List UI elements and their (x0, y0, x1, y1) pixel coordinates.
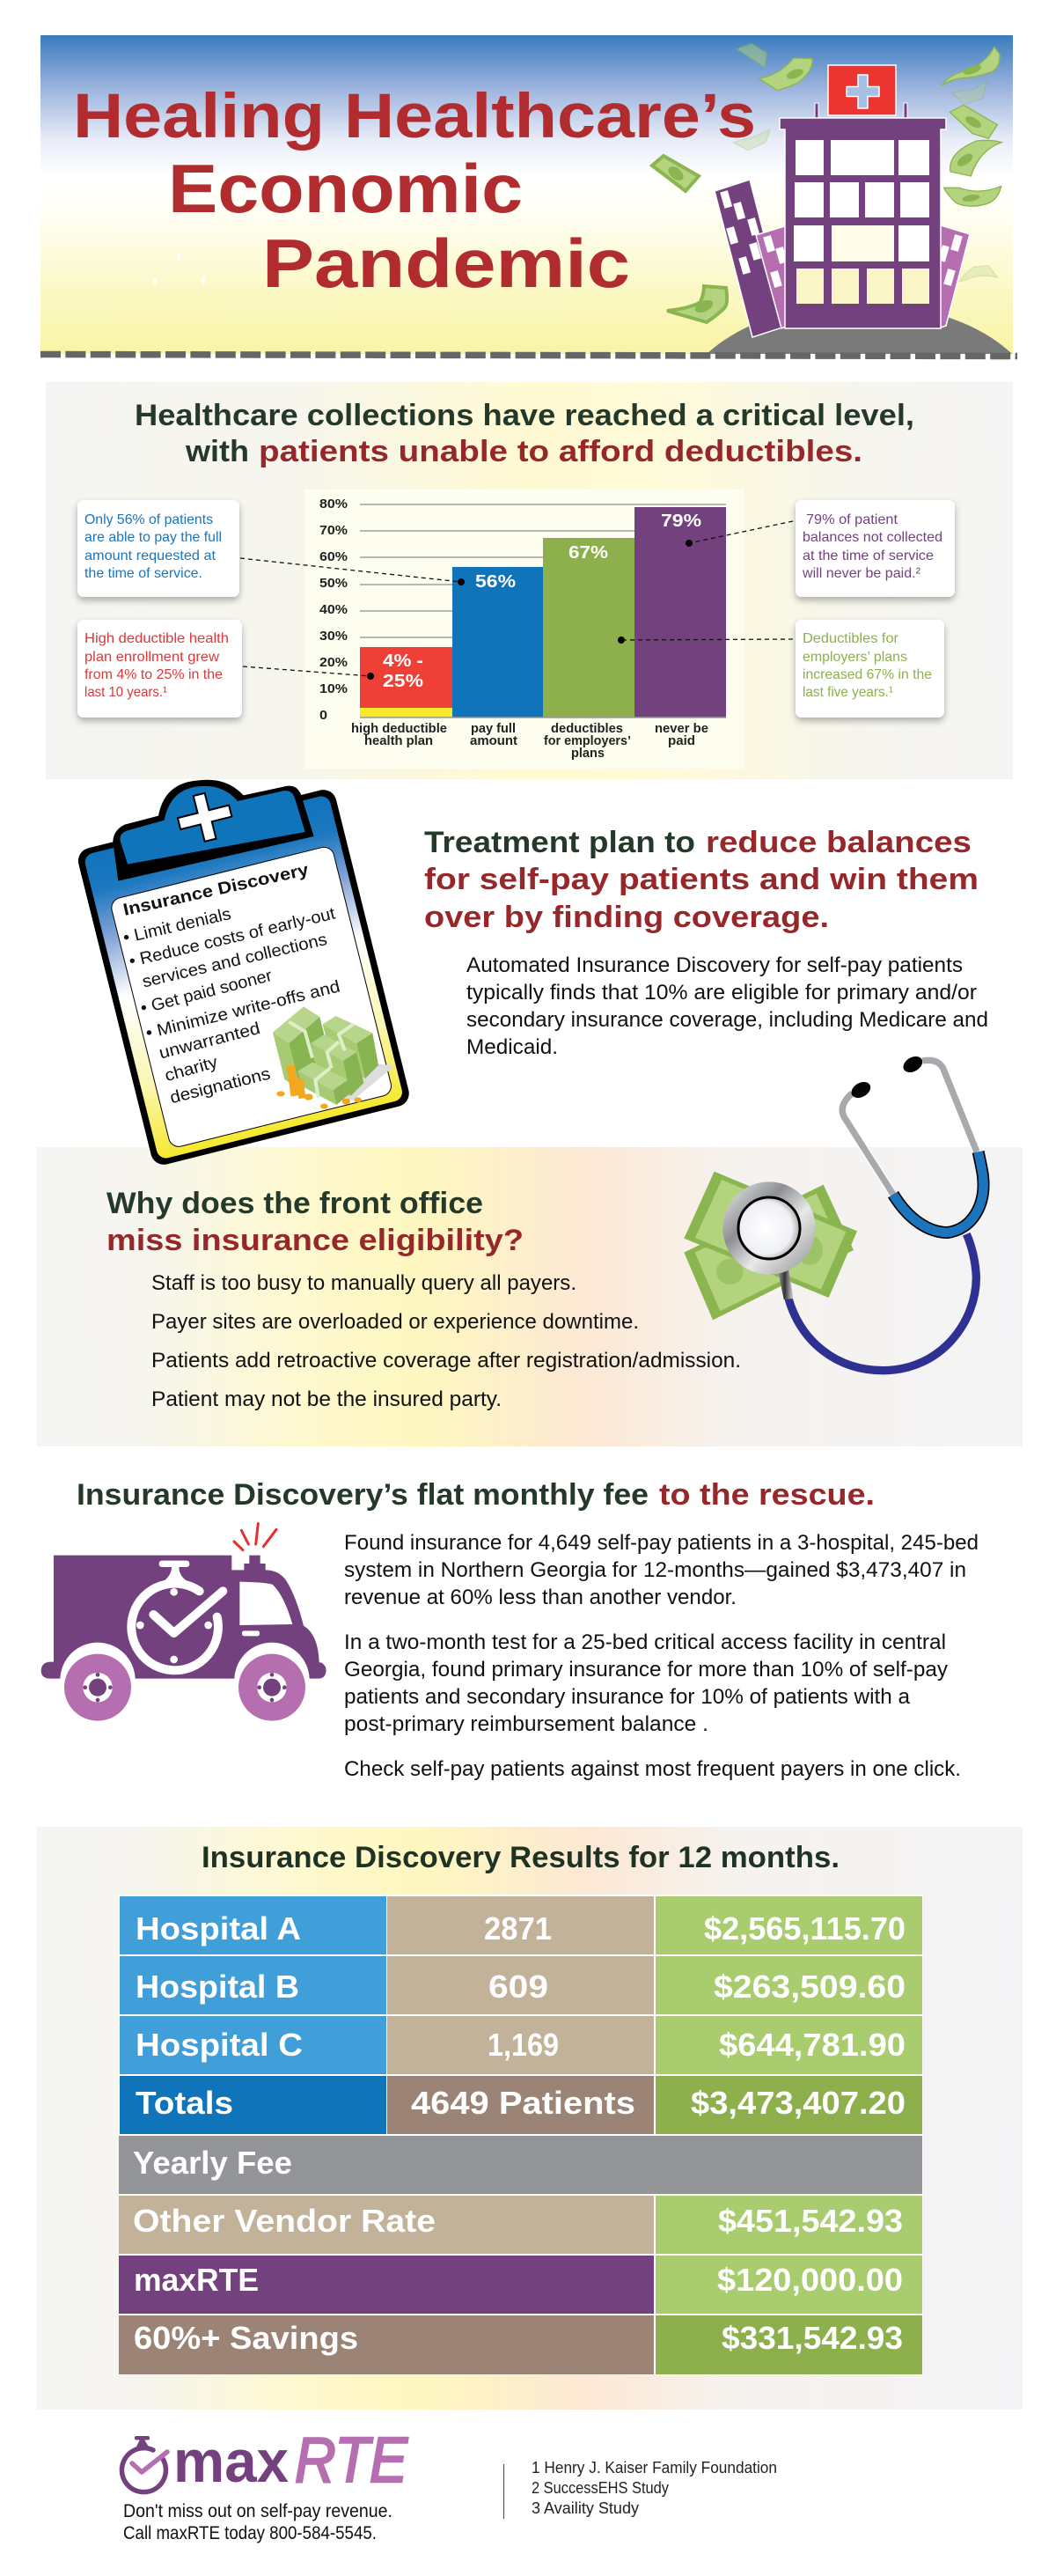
text block: reasons (151, 1271, 741, 1411)
callout: 79%: balances not collected (803, 530, 942, 545)
callout: 56%: Only 56% of patients (84, 512, 213, 527)
heading: treatment plan: reduce balances (706, 826, 972, 859)
clipboard board (76, 787, 412, 1167)
clipboard clip (113, 780, 314, 881)
x axis labels: paid (668, 734, 695, 748)
text block: case studies: revenue at 60% less than another vendor. (344, 1586, 737, 1609)
bars (360, 507, 726, 718)
heading: patients unable to afford deductibles. (259, 435, 862, 468)
icon: left tilted building (715, 180, 788, 337)
icon: money stacks and coins (273, 1006, 394, 1109)
references: 2 SuccessEHS Study (532, 2479, 669, 2497)
icon: clipboard (76, 780, 412, 1167)
title: Economic (168, 150, 523, 227)
banner background (40, 35, 1013, 354)
footer (121, 2425, 777, 2543)
bar values: 67% (568, 543, 608, 563)
icon: main hospital building (780, 65, 946, 328)
title: Pandemic (262, 224, 630, 302)
y axis labels: 0 (319, 708, 327, 723)
text block: automated discovery (466, 953, 988, 1059)
callout: high deductible: High deductible health (84, 631, 229, 646)
stethoscope tubes (788, 1060, 983, 1371)
y axis labels: 30% (319, 629, 348, 644)
x axis labels: health plan (364, 734, 433, 748)
y axis labels: 20% (319, 655, 348, 670)
heading: treatment plan (424, 826, 979, 934)
title: Healing Healthcare’s (73, 82, 756, 151)
callout: 56%: are able to pay the full (84, 530, 222, 545)
clipboard text: unwarranted (158, 1019, 262, 1064)
table text: Other Vendor Rate (133, 2203, 436, 2239)
clipboard text: • Reduce costs of early-out (128, 904, 338, 971)
table text: maxRTE (134, 2262, 259, 2298)
x axis labels: for employers’ (544, 734, 631, 748)
callout: 67%: increased 67% in the (803, 667, 932, 682)
table text: 2871 (484, 1910, 552, 1947)
front wheel and rear wheel (60, 1643, 310, 1721)
text block: reasons: Patient may not be the insured party. (151, 1387, 502, 1411)
results table (119, 1895, 923, 2375)
text block: reasons: Staff is too busy to manually query all payers. (151, 1271, 576, 1295)
clipboard text (121, 861, 342, 1108)
heading: Why does the front office (106, 1187, 483, 1220)
x axis labels: pay full (471, 722, 516, 736)
text block: case studies: system in Northern Georgia for 12-months—gained $3,473,407 in (344, 1558, 966, 1582)
clipboard text: designations (168, 1065, 272, 1108)
table text: $2,565,115.70 (704, 1910, 906, 1947)
callout: 79%: will never be paid.² (802, 566, 921, 581)
icon: stethoscope on money (684, 1053, 983, 1371)
callout: 56%: amount requested at (84, 548, 216, 563)
x axis labels (351, 722, 708, 761)
clipboard text: • Limit denials (121, 905, 233, 948)
clipboard text: charity (163, 1053, 220, 1086)
table text: Totals (136, 2085, 233, 2121)
x axis labels: never be (655, 722, 708, 736)
title (73, 82, 756, 302)
icon: hospital with flying money (652, 43, 1012, 354)
references: 3 Availity Study (532, 2499, 639, 2517)
heading: miss insurance eligibility? (106, 1224, 524, 1257)
callout: 79% (796, 500, 955, 597)
bar values: 25% (383, 672, 423, 691)
callout: 79%: 79% of patient (806, 512, 898, 527)
callout: 67%: Deductibles for (803, 631, 899, 646)
logo clock icon (121, 2436, 167, 2492)
tagline: Don't miss out on self-pay revenue. (123, 2501, 392, 2521)
text block: case studies: patients and secondary insurance for 10% of patients with a (344, 1685, 910, 1709)
y axis labels: 70% (319, 523, 348, 538)
tagline (123, 2501, 392, 2543)
callout: high deductible (77, 620, 242, 718)
y axis labels: 60% (319, 549, 348, 564)
table text: Yearly Fee (133, 2145, 292, 2181)
table text: $3,473,407.20 (691, 2085, 906, 2121)
callout: 56% (77, 500, 239, 597)
clock with check mark (131, 1561, 223, 1670)
banner (40, 35, 1017, 356)
table text: $644,781.90 (719, 2027, 906, 2063)
clipboard text: • Get paid sooner (139, 967, 275, 1019)
table text: Hospital A (136, 1910, 301, 1947)
callout: high deductible: plan enrollment grew (84, 650, 219, 665)
y axis labels (319, 497, 348, 723)
text block: automated discovery: secondary insurance coverage, including Medicare and (466, 1008, 988, 1032)
text block: case studies: Found insurance for 4,649 self-pay patients in a 3-hospital, 245-bed (344, 1531, 979, 1555)
bar values: 56% (475, 572, 516, 592)
leader lines (240, 521, 793, 676)
ambulance window (239, 1582, 292, 1625)
clipboard text: services and collections (141, 931, 329, 992)
y axis labels: 10% (319, 681, 348, 696)
heading: Healthcare collections have reached a critical level, (135, 399, 914, 432)
heading (135, 399, 914, 468)
table text: 609 (488, 1969, 548, 2005)
table text (133, 1910, 906, 2356)
callout: high deductible: last 10 years.¹ (84, 685, 167, 700)
heading: treatment plan: for self-pay patients and win them (424, 863, 979, 896)
text block: case studies (344, 1531, 979, 1781)
clipboard text: • Minimize write-offs and (144, 977, 342, 1043)
panel: critical level (46, 382, 1013, 779)
heading (106, 1187, 524, 1257)
x axis labels: deductibles (551, 722, 623, 736)
heading: flat monthly fee: Insurance Discovery’s flat monthly fee (77, 1478, 649, 1512)
logo: maxRTE (121, 2425, 408, 2496)
heading: flat monthly fee: to the rescue. (659, 1478, 875, 1512)
text block: reasons: Patients add retroactive coverage after registration/admission. (151, 1349, 741, 1373)
logo: maxRTE: max (173, 2428, 289, 2495)
panel: front office (37, 1147, 1023, 1446)
x axis labels: high deductible (351, 722, 447, 736)
table text: 60%+ Savings (134, 2320, 358, 2356)
panel: results (37, 1827, 1023, 2410)
y axis labels: 40% (319, 602, 348, 617)
table text: $331,542.93 (722, 2320, 903, 2356)
text block: case studies: post-primary reimbursement balance . (344, 1712, 708, 1736)
text block: case studies: In a two-month test for a 25-bed critical access facility in central (344, 1630, 946, 1654)
callout: 67%: last five years.¹ (803, 685, 893, 700)
siren lines (234, 1524, 276, 1550)
icon: ambulance (41, 1524, 326, 1721)
icon: flying money bills (733, 43, 1001, 282)
text block: automated discovery: Medicaid. (466, 1035, 558, 1059)
clipboard text: Insurance Discovery (121, 861, 311, 920)
heading: Insurance Discovery Results for 12 months. (202, 1841, 840, 1874)
callout: 79%: at the time of service (803, 548, 934, 563)
text block: reasons: Payer sites are overloaded or experience downtime. (151, 1310, 639, 1334)
table text: $120,000.00 (717, 2262, 903, 2298)
heading: treatment plan: over by finding coverage. (424, 901, 829, 934)
bar values: 79% (661, 512, 701, 531)
x axis labels: amount (470, 734, 517, 748)
text block: case studies: Check self-pay patients against most frequent payers in one click. (344, 1757, 961, 1781)
references (532, 2459, 777, 2517)
tagline: Call maxRTE today 800-584-5545. (123, 2523, 377, 2543)
chest piece (722, 1181, 816, 1299)
references: 1 Henry J. Kaiser Family Foundation (532, 2459, 777, 2477)
callout: 67%: employers’ plans (803, 650, 907, 665)
ambulance body (41, 1556, 326, 1679)
callout: high deductible: from 4% to 25% in the (84, 667, 223, 682)
bar values (383, 512, 701, 691)
heading: treatment plan: Treatment plan to (424, 826, 695, 859)
text block: automated discovery: Automated Insurance Discovery for self-pay patients (466, 953, 963, 977)
table text: $263,509.60 (714, 1969, 906, 2005)
y axis labels: 80% (319, 497, 348, 512)
logo: maxRTE: RTE (295, 2425, 408, 2496)
table text: $451,542.93 (718, 2203, 903, 2239)
callout: 56%: the time of service. (84, 566, 202, 581)
table text: 4649 Patients (411, 2085, 635, 2121)
callout: 67% (796, 620, 944, 718)
bar values: 4% - (383, 651, 423, 671)
table text: Hospital C (136, 2027, 303, 2063)
icon: right tilted building (938, 224, 970, 328)
x axis labels: plans (571, 747, 605, 761)
money bills (684, 1172, 857, 1320)
table text: 1,169 (488, 2027, 559, 2063)
y axis labels: 50% (319, 576, 348, 591)
text block: case studies: Georgia, found primary insurance for more than 10% of self-pay (344, 1658, 949, 1682)
table text: Hospital B (136, 1969, 299, 2005)
bar chart (304, 489, 744, 769)
heading: flat monthly fee (77, 1478, 875, 1512)
heading: with (185, 435, 249, 468)
text block: automated discovery: typically finds that 10% are eligible for primary and/or (466, 981, 977, 1005)
